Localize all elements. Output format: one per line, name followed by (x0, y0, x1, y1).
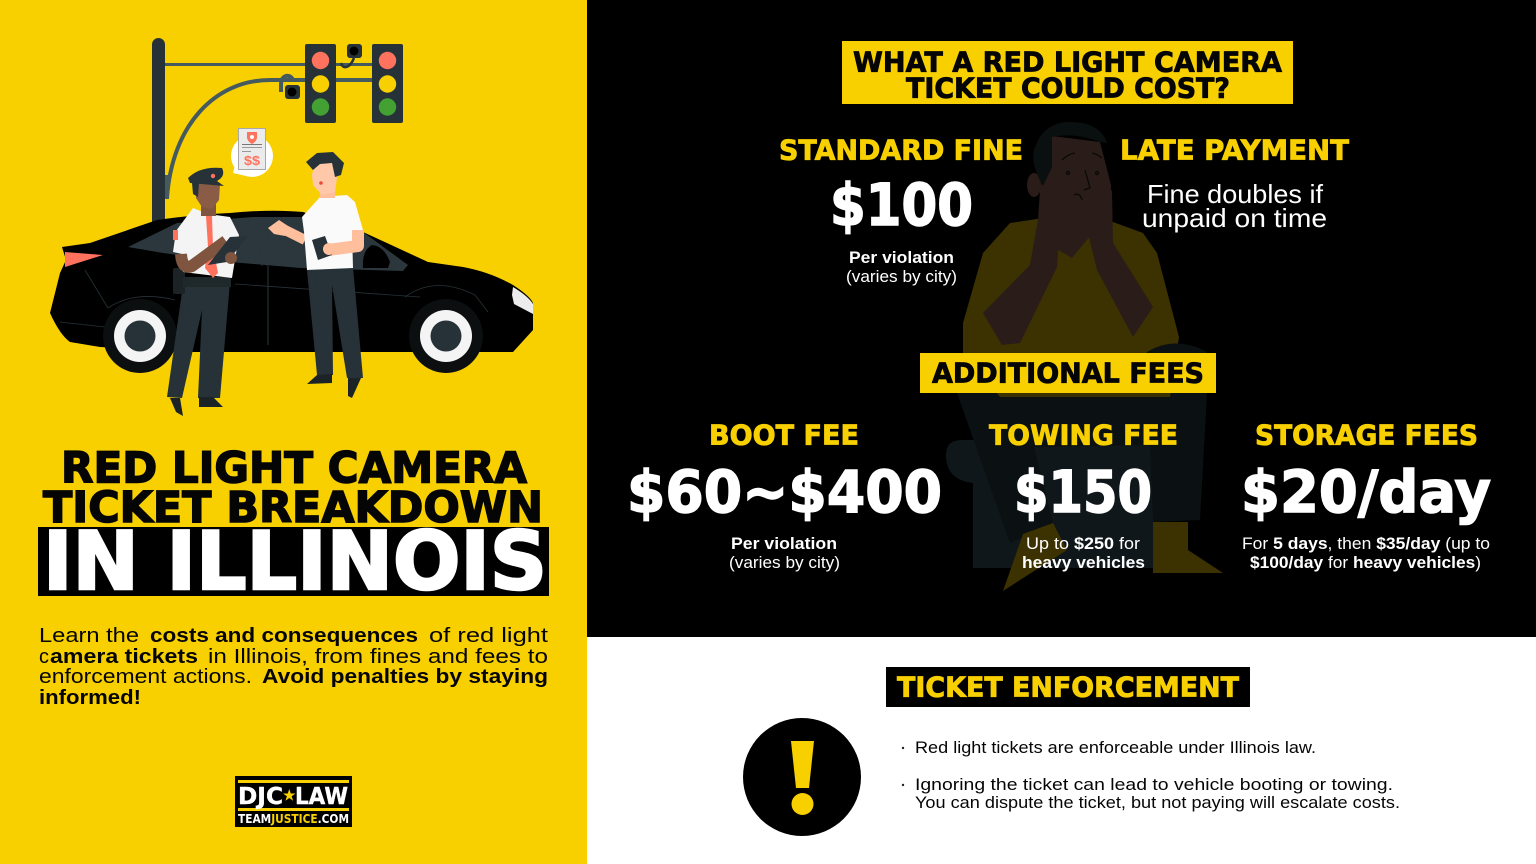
block: standard fine: Per violation (849, 249, 954, 267)
block: towing fee: heavy vehicles (1022, 554, 1145, 572)
panel: left yellow (0, 0, 587, 864)
heading: what a ticket could cost (842, 41, 1293, 104)
block: late payment: LATE PAYMENT (1120, 134, 1349, 166)
block: standard fine: STANDARD FINE (779, 134, 1023, 166)
car wheel rear (103, 299, 177, 373)
illustration: traffic stop scene (50, 38, 533, 416)
right boot (1153, 522, 1223, 573)
block: boot fee: $60~$400 (627, 458, 942, 526)
block: standard fine: $100 (830, 171, 973, 239)
intro paragraph: amera tickets (50, 645, 198, 668)
block: storage fees: For 5 days, then $35/day (up to (1242, 535, 1490, 553)
enforcement bullets: Red light tickets are enforceable under Illinois law. (915, 739, 1316, 757)
block: boot fee: Per violation (731, 535, 837, 553)
enforcement bullets: You can dispute the ticket, but not paying will escalate costs. (915, 794, 1400, 812)
block: storage fees (1241, 420, 1491, 572)
block: towing fee (989, 420, 1178, 572)
intro paragraph (39, 624, 548, 709)
intro paragraph: in Illinois, from fines and fees to (208, 645, 548, 668)
block: storage fees: STORAGE FEES (1255, 420, 1478, 452)
icon: speech bubble with ticket (231, 128, 273, 177)
block: late payment: Fine doubles if (1147, 179, 1324, 209)
logo: DJC Law: ★ (283, 787, 296, 803)
intro paragraph: costs and consequences (150, 624, 418, 647)
block: late payment (1120, 134, 1349, 233)
block: standard fine: (varies by city) (846, 268, 957, 286)
icon: lower camera (281, 76, 300, 99)
right arm and hand (1088, 190, 1153, 337)
block: standard fine (779, 134, 1023, 286)
block: late payment: unpaid on time (1142, 203, 1327, 233)
logo: DJC Law: LAW (295, 784, 348, 810)
heading: additional fees: ADDITIONAL FEES (932, 358, 1204, 390)
head and neck (1040, 136, 1112, 258)
block: towing fee: $150 (1014, 458, 1152, 526)
sofa (946, 440, 1153, 568)
logo: DJC Law: TEAMJUSTICE.COM (238, 812, 349, 826)
left boot (1003, 523, 1067, 591)
title (38, 444, 549, 608)
panel: cost black (587, 0, 1536, 637)
icon: upper camera (341, 44, 362, 67)
block: storage fees: $20/day (1241, 458, 1491, 526)
intro paragraph: informed! (39, 686, 141, 709)
intro paragraph: Avoid penalties by staying (262, 665, 548, 688)
heading: what a ticket could cost: WHAT A RED LIGHT CAMERA (853, 46, 1282, 78)
hair (1033, 122, 1107, 186)
logo: DJC Law (235, 776, 352, 827)
panel: enforcement white (587, 637, 1536, 864)
intro paragraph: enforcement actions. (39, 665, 252, 688)
title highlight: in Illinois: IN ILLINOIS (43, 515, 547, 608)
logo: DJC Law: DJC (238, 784, 283, 810)
icon: exclamation mark (743, 718, 861, 836)
heading: ticket enforcement: TICKET ENFORCEMENT (897, 672, 1239, 704)
icon: traffic light right (372, 44, 403, 123)
trousers (957, 393, 1207, 543)
face (1062, 153, 1102, 200)
man in white shirt (268, 152, 363, 398)
block: towing fee: TOWING FEE (989, 420, 1178, 452)
police officer (167, 168, 248, 416)
intro paragraph: Learn the (39, 624, 139, 647)
enforcement bullets: Ignoring the ticket can lead to vehicle booting or towing. (915, 776, 1393, 794)
intro paragraph: c (39, 645, 49, 668)
left arm and hand (983, 190, 1060, 345)
ear (1027, 173, 1041, 197)
intro paragraph: of red light (429, 624, 548, 647)
icon: traffic light left (305, 44, 336, 123)
block: boot fee: (varies by city) (729, 554, 840, 572)
block: storage fees: $100/day for heavy vehicles ) (1250, 554, 1481, 572)
title: RED LIGHT CAMERA (61, 444, 528, 494)
icon: traffic signal pole (152, 38, 373, 228)
heading: what a ticket could cost: TICKET COULD COST? (906, 72, 1230, 104)
block: boot fee: BOOT FEE (709, 420, 859, 452)
right leg top (1140, 344, 1207, 393)
enforcement bullets (902, 739, 1400, 812)
car (50, 211, 533, 352)
car wheel front (409, 299, 483, 373)
illustration: worried man in shadow (946, 122, 1223, 591)
block: boot fee (627, 420, 942, 572)
shirt (963, 217, 1179, 397)
icon: speech bubble with ticket: $$ (244, 153, 261, 168)
block: towing fee: Up to $250 for (1026, 535, 1141, 553)
title: TICKET BREAKDOWN (43, 483, 543, 533)
